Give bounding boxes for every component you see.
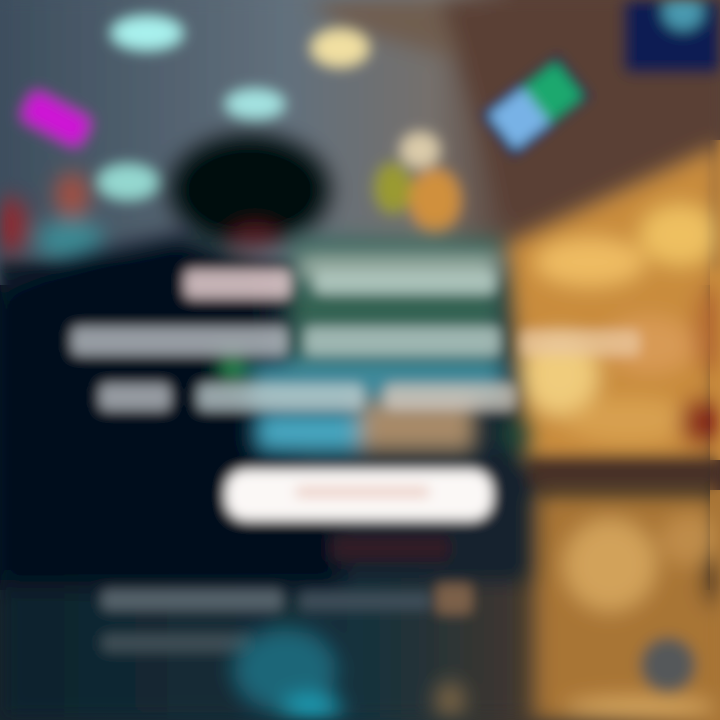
panel: dark red shadow under button bbox=[330, 535, 450, 561]
background: store ceiling bbox=[0, 0, 720, 270]
panel: left background figures bbox=[0, 173, 104, 260]
background: floor area bbox=[0, 580, 720, 720]
panel: lower-right counter bbox=[535, 492, 720, 720]
panel: hair of person in stripes bbox=[374, 132, 461, 232]
panel: striped shirt bbox=[219, 238, 529, 452]
panel: golden food shelves bbox=[505, 145, 720, 465]
panel: dark foreground person bbox=[0, 134, 340, 585]
icon: ceiling light lower bbox=[97, 164, 159, 200]
icon: magenta sign bbox=[18, 88, 94, 150]
panel: teal floor reflection bbox=[233, 628, 464, 720]
heading: blurred title line 3 bbox=[100, 384, 515, 410]
icon: ceiling light centre bbox=[225, 89, 285, 119]
background: mid-store shadow bbox=[0, 260, 540, 600]
heading: blurred title line 1 bbox=[185, 270, 495, 298]
panel: shelf counter band bbox=[528, 458, 720, 486]
text block: blurred description line 2 bbox=[102, 634, 252, 652]
panel: brown upper-right wall bbox=[310, 0, 720, 225]
icon: green and blue screen bbox=[479, 53, 592, 159]
icon: round grey badge bbox=[641, 638, 695, 692]
icon: ceiling light warm bbox=[311, 29, 369, 67]
icon: ceiling light left bbox=[111, 16, 183, 50]
icon: dark blue top-right screen bbox=[625, 0, 720, 72]
heading: blurred title line 2 bbox=[72, 327, 640, 356]
button: white call to action bbox=[226, 470, 492, 520]
text block: blurred description line 1 bbox=[102, 584, 472, 614]
